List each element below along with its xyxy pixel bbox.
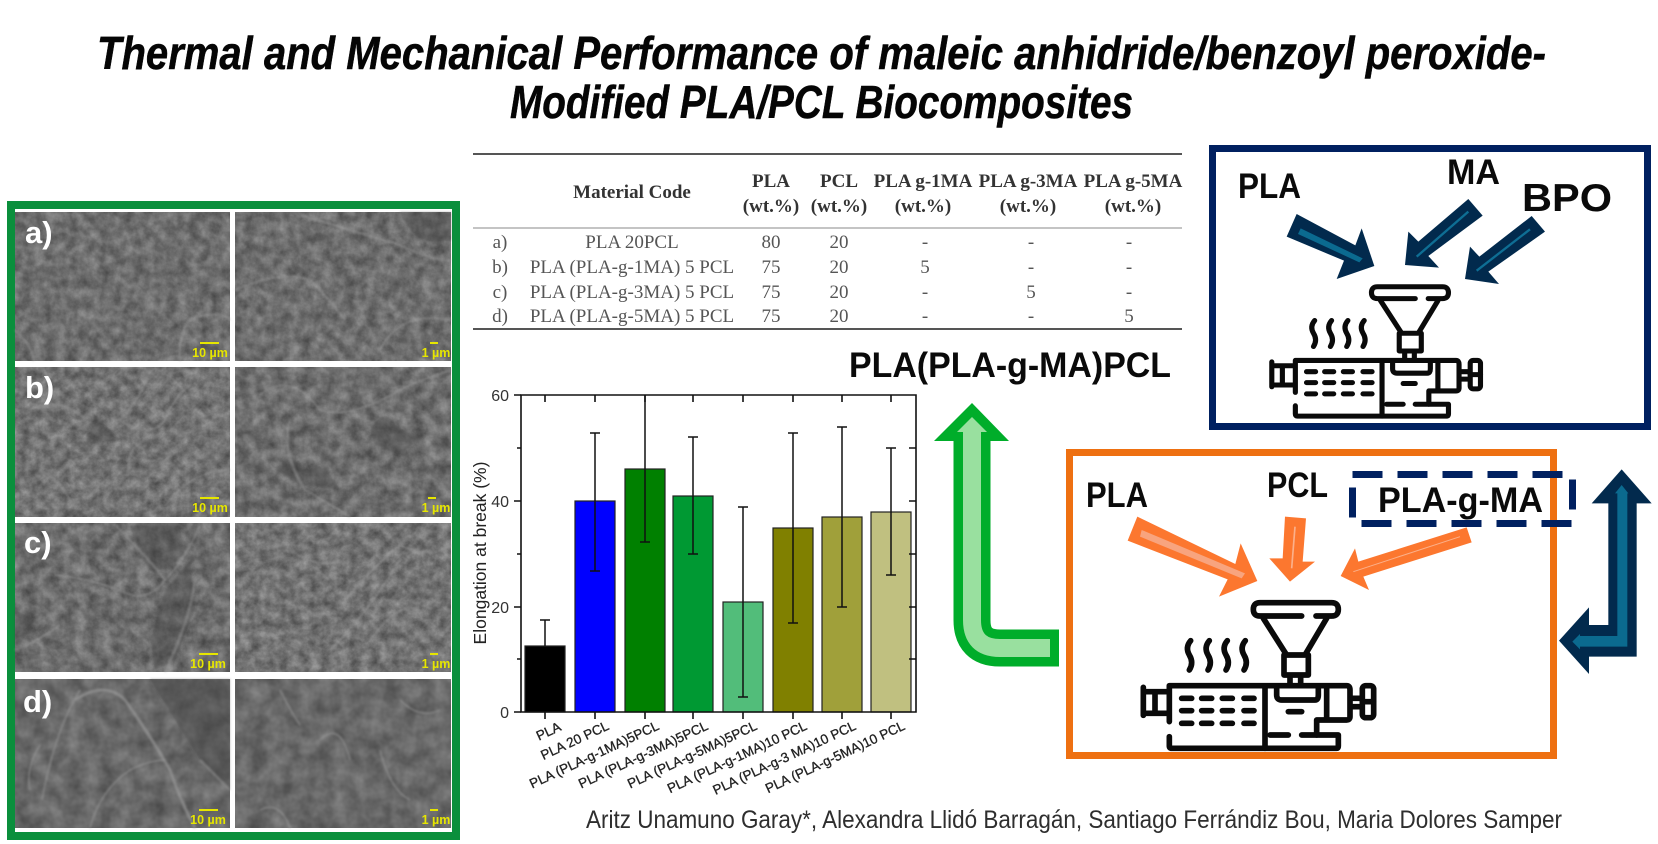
SEM row a: 10 µm	[192, 346, 228, 360]
label: PLA: PLA	[1086, 476, 1148, 515]
table: material composition: PLA g-5MA	[1084, 171, 1183, 192]
table: material composition: -	[1028, 257, 1034, 278]
table: material composition: PLA (PLA-g-5MA) 5 PCL	[530, 306, 734, 327]
table: material composition: -	[922, 282, 928, 303]
panel: grafting step	[1212, 148, 1648, 426]
error bars	[540, 395, 896, 697]
table: material composition: 5	[920, 257, 930, 278]
SEM row d: 10 µm	[190, 813, 226, 827]
table: material composition: (wt.%)	[1000, 196, 1056, 217]
title	[97, 27, 1546, 128]
table: material composition: -	[1028, 232, 1034, 253]
SEM row d: d)	[23, 684, 52, 719]
y axis labels: 60	[491, 388, 509, 405]
y axis labels: 0	[500, 705, 509, 722]
SEM row b: b)	[25, 370, 54, 405]
table: material composition: PLA g-1MA	[874, 171, 973, 192]
x axis labels: PLA (PLA-g-3MA)5PCL	[576, 718, 711, 791]
x axis labels: PLA 20 PCL	[538, 718, 612, 763]
table: material composition	[473, 154, 1183, 329]
x axis labels	[527, 718, 908, 798]
table: material composition: Material Code	[573, 182, 691, 203]
SEM row c	[15, 523, 451, 672]
table: material composition: -	[1126, 257, 1132, 278]
SEM row c: c)	[24, 525, 52, 560]
bars	[525, 469, 911, 712]
table: material composition: b)	[492, 257, 508, 278]
x axis labels: PLA (PLA-g-1MA)10 PCL	[665, 718, 810, 796]
SEM row a: a)	[25, 215, 53, 250]
SEM row d	[15, 679, 451, 828]
x axis labels: PLA (PLA-g-5MA)10 PCL	[763, 718, 908, 796]
arrows: orange inputs	[1128, 517, 1472, 597]
table: material composition: -	[922, 232, 928, 253]
axes and ticks	[514, 395, 916, 719]
table: material composition: -	[922, 306, 928, 327]
dashed box: PLA-g-MA: PLA-g-MA	[1378, 481, 1543, 520]
table: material composition: -	[1028, 306, 1034, 327]
panel: blending step	[1070, 452, 1572, 756]
table: material composition: 5	[1026, 282, 1036, 303]
arrow: navy double-bend arrow	[1559, 469, 1652, 674]
table: material composition: a)	[493, 232, 507, 253]
y axis labels	[470, 388, 509, 722]
label: MA: MA	[1447, 153, 1500, 192]
table: material composition: (wt.%)	[1105, 196, 1161, 217]
table: material composition: -	[1126, 282, 1132, 303]
SEM row c: 10 µm	[190, 657, 226, 671]
table: material composition: c)	[493, 282, 507, 303]
SEM row b: 10 µm	[192, 501, 228, 515]
table: material composition: (wt.%)	[811, 196, 867, 217]
label: PLA: PLA	[1238, 167, 1301, 206]
table: material composition: PLA (PLA-g-3MA) 5 PCL	[530, 282, 734, 303]
SEM row b: 1 µm	[422, 501, 450, 515]
table: material composition: 75	[762, 306, 780, 327]
table: material composition: 20	[830, 282, 848, 303]
table: material composition: 20	[830, 257, 848, 278]
icon: extruder	[1272, 287, 1480, 416]
bar chart: elongation at break	[470, 388, 916, 798]
panel: SEM micrographs	[7, 201, 460, 840]
table: material composition: (wt.%)	[743, 196, 799, 217]
table: material composition: 20	[830, 232, 848, 253]
label: PCL: PCL	[1267, 466, 1328, 505]
authors: Aritz Unamuno Garay*, Alexandra Llidó Barragán, Santiago Ferrándiz Bou, Maria Dolores Samper	[586, 806, 1562, 834]
table: material composition: PLA g-3MA	[979, 171, 1078, 192]
x axis labels: PLA	[534, 719, 563, 744]
x axis labels: PLA (PLA-g-5MA)5PCL	[625, 718, 760, 791]
product label: PLA(PLA-g-MA)PCL	[849, 346, 1171, 385]
title: Modified PLA/PCL Biocomposites	[510, 76, 1133, 128]
y axis labels: 40	[491, 494, 509, 511]
label: BPO: BPO	[1522, 177, 1612, 220]
dashed box: PLA-g-MA	[1352, 474, 1572, 524]
arrow: green up arrow	[934, 403, 1059, 648]
SEM row d: 1 µm	[422, 813, 450, 827]
table: material composition: 75	[762, 282, 780, 303]
table: material composition: 80	[762, 232, 780, 253]
table: material composition: d)	[492, 306, 508, 327]
table: material composition: (wt.%)	[895, 196, 951, 217]
SEM row a	[15, 212, 451, 361]
table: material composition: PCL	[820, 171, 858, 192]
table: material composition: 5	[1124, 306, 1134, 327]
table: material composition: PLA (PLA-g-1MA) 5 PCL	[530, 257, 734, 278]
y axis labels: Elongation at break (%)	[470, 462, 490, 644]
table: material composition: PLA 20PCL	[585, 232, 679, 253]
SEM row b	[15, 367, 451, 517]
icon: extruder	[1143, 603, 1374, 748]
y axis labels: 20	[491, 600, 509, 617]
table: material composition: -	[1126, 232, 1132, 253]
x axis labels: PLA (PLA-g-3 MA)10 PCL	[710, 718, 859, 798]
table: material composition: PLA	[752, 171, 790, 192]
SEM row a: 1 µm	[422, 346, 450, 360]
SEM row c: 1 µm	[422, 657, 450, 671]
table: material composition: 75	[762, 257, 780, 278]
x axis labels: PLA (PLA-g-1MA)5PCL	[527, 718, 662, 791]
table: material composition: 20	[830, 306, 848, 327]
arrows: navy inputs	[1287, 199, 1545, 284]
